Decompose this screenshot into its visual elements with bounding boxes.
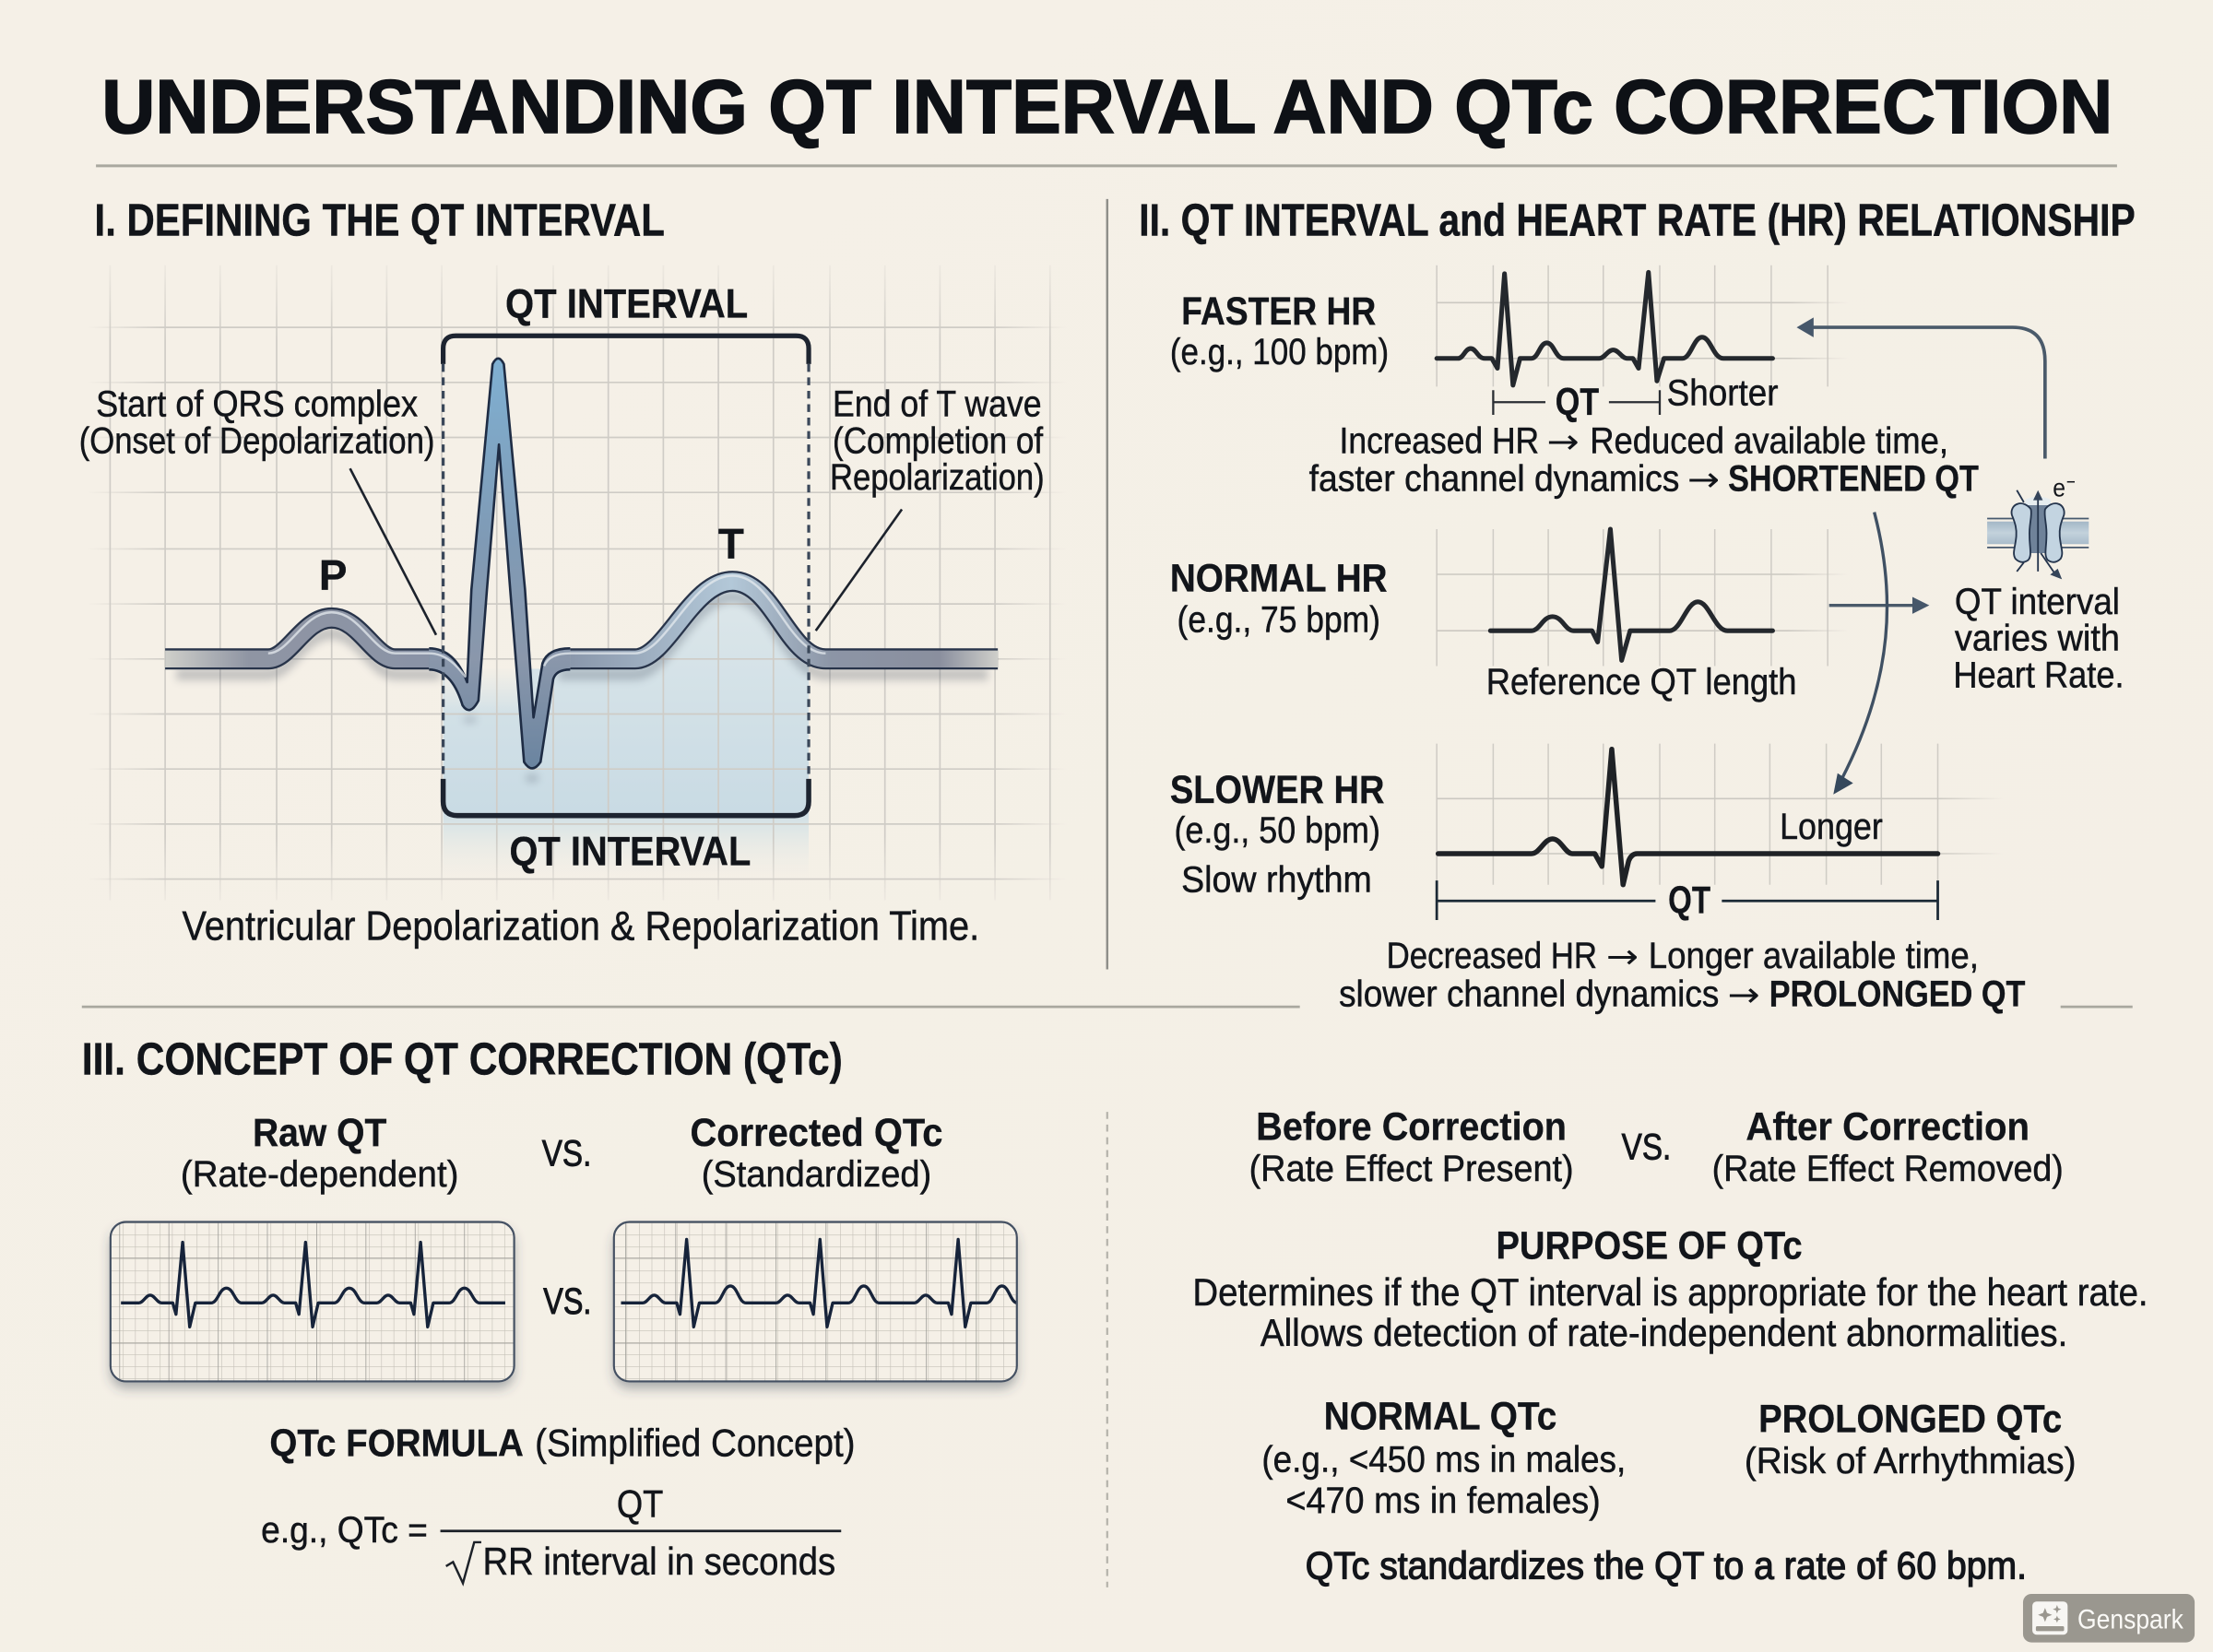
label: shorter: Shorter [1667,372,1779,413]
label: raw QT [181,1111,458,1195]
dashed interval boundaries [444,364,809,779]
callout: start of QRS: Start of QRS complex [96,384,418,425]
ECG waveform with P, QRS and T [165,359,998,782]
label: vs: VS. [542,1133,591,1174]
callout: end of T wave: Repolarization) [830,457,1045,498]
explanation: prolonged QT: slower channel dynamics [1339,974,1719,1014]
icon: ion channel [1987,473,2089,579]
QT measure bar: QT [1668,879,1710,921]
row: normal heart rate [1170,529,1849,702]
bottom bracket and label: QT INTERVAL [510,829,751,874]
badge: Genspark [2023,1594,2195,1643]
card: raw QT ECG strip [111,1222,515,1381]
label: corrected QTc [690,1111,942,1195]
arrow: normal HR to note [1829,596,1929,614]
explanation: prolonged QT: → [1727,974,1760,1014]
note: QT varies with heart rate [1953,582,2124,695]
arrow: channel to faster HR [1796,317,2045,458]
callout: start of QRS [79,384,436,635]
formula: e.g., QTc = [261,1510,428,1551]
label: after correction [1712,1105,2064,1189]
icon: ion channel: e [2053,473,2065,502]
text block: prolonged QTc [1745,1398,2077,1481]
explanation: shortened QT [1309,420,1979,500]
panel: II. QT interval and heart rate [1139,196,2136,1014]
shaded QT area under the curve [444,582,809,886]
label: slower HR: (e.g., 50 bpm) [1174,810,1380,851]
text block: prolonged QTc: PROLONGED QTc [1758,1398,2062,1442]
heading: QTc formula: (Simplified Concept) [535,1422,856,1465]
heading: QTc formula [269,1422,856,1465]
label: reference QT length: Reference QT length [1486,662,1796,702]
explanation: prolonged QT: Longer available time, [1649,936,1979,976]
label: slower HR: Slow rhythm [1181,859,1372,900]
explanation: shortened QT: → [1547,421,1580,461]
row: slower heart rate [1170,744,2025,1014]
heading: section I: I. DEFINING THE QT INTERVAL [95,196,665,246]
text block: purpose of QTc: PURPOSE OF QTc [1496,1223,1803,1268]
text block: purpose of QTc: Determines if the QT interval is appropriate for the heart rate. [1192,1271,2148,1314]
formula [261,1482,841,1583]
label: T wave: T [718,520,744,568]
text block: prolonged QTc: (Risk of Arrhythmias) [1745,1441,2077,1481]
top bracket and label [444,281,809,364]
explanation: shortened QT: Reduced available time, [1590,420,1948,461]
label: after correction: After Correction [1746,1105,2030,1150]
arrow: curved to slower HR [1833,513,1888,795]
label: slower HR: SLOWER HR [1170,768,1385,812]
label: before correction [1249,1105,1574,1189]
heading: section III: III. CONCEPT OF QT CORRECTION (QTc) [82,1035,843,1085]
card: corrected QTc ECG strip [614,1222,1017,1381]
panel: I. defining the QT interval [79,196,1067,949]
label: after correction: (Rate Effect Removed) [1712,1149,2064,1189]
formula: QT [617,1482,663,1525]
explanation: shortened QT: SHORTENED QT [1728,459,1979,500]
label: raw QT: (Rate-dependent) [181,1154,458,1195]
QT measure bar: QT [1556,381,1599,423]
QT measure bar [1437,879,1938,921]
title: UNDERSTANDING QT INTERVAL AND QTc CORRECTION [101,64,2112,149]
explanation: shortened QT: → [1687,460,1720,500]
explanation: prolonged QT: PROLONGED QT [1769,974,2025,1014]
explanation: prolonged QT: Decreased HR [1387,936,1597,976]
text block: normal QTc: (e.g., <450 ms in males, [1261,1439,1626,1480]
callout: end of T wave [816,384,1045,631]
text block: purpose of QTc: Allows detection of rate-independent abnormalities. [1260,1312,2067,1354]
text block: purpose of QTc [1192,1223,2148,1354]
top bracket and label: QT INTERVAL [505,281,748,326]
label: longer: Longer [1780,807,1883,847]
label: faster HR: FASTER HR [1181,289,1376,334]
note: QT varies with heart rate: QT interval [1955,582,2120,622]
label: raw QT: Raw QT [253,1111,386,1155]
conclusion: QTc standardizes the QT to a rate of 60 bpm. [1306,1545,2027,1587]
ECG trace: shorter QT [1437,272,1772,385]
formula: RR interval in seconds [482,1540,835,1583]
text block: normal QTc: <470 ms in females) [1285,1481,1601,1521]
heading: QTc formula: QTc FORMULA [269,1422,524,1465]
grid: normal HR [1437,529,1849,666]
label: vs: VS. [1622,1127,1671,1167]
label: before correction: (Rate Effect Present) [1249,1149,1574,1189]
grid: slower HR [1437,744,2004,885]
panel: III. concept of QT correction, left [82,1035,1017,1583]
panel: III. concept of QT correction, right [1192,1105,2148,1587]
label: corrected QTc: Corrected QTc [690,1111,942,1155]
text block: normal QTc: NORMAL QTc [1324,1395,1556,1439]
badge: Genspark: Genspark [2077,1604,2183,1634]
explanation: shortened QT: Increased HR [1340,420,1539,461]
row: faster heart rate [1170,266,1979,500]
callout: end of T wave: (Completion of [833,420,1044,461]
note: QT varies with heart rate: Heart Rate. [1953,655,2124,695]
label: P wave: P [319,551,348,599]
label: faster HR [1170,289,1389,372]
QT measure bar [1493,381,1660,423]
label: vs between cards: VS. [543,1281,591,1322]
label: faster HR: (e.g., 100 bpm) [1170,332,1389,372]
explanation: prolonged QT: → [1606,937,1639,976]
ECG trace: reference QT [1490,529,1772,660]
label: corrected QTc: (Standardized) [702,1154,931,1195]
label: before correction: Before Correction [1256,1105,1567,1150]
ECG paper grid [88,266,1067,901]
label: normal HR: NORMAL HR [1170,556,1388,600]
caption: Ventricular Depolarization & Repolarization Time. [182,903,979,949]
label: normal HR: (e.g., 75 bpm) [1178,600,1380,641]
explanation: shortened QT: faster channel dynamics [1309,459,1679,500]
bottom bracket and label [444,779,809,874]
grid: faster HR [1437,266,1849,386]
explanation: prolonged QT [1339,936,2025,1014]
label: slower HR [1170,768,1385,900]
text block: normal QTc [1261,1395,1626,1521]
callout: start of QRS: (Onset of Depolarization) [79,420,434,461]
note: QT varies with heart rate: varies with [1955,619,2120,659]
ECG trace: longer QT [1438,749,1938,885]
callout: end of T wave: End of T wave [833,384,1042,425]
label: normal HR [1170,556,1388,641]
